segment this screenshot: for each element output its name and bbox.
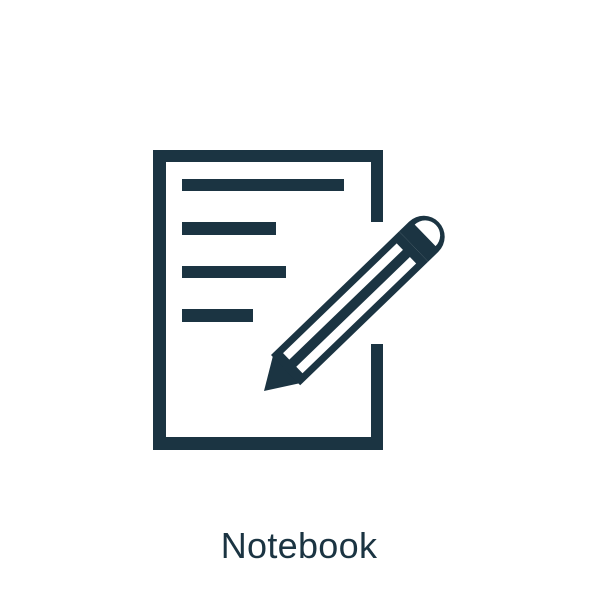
icon: pencil [249, 207, 453, 406]
icon: notebook page [153, 150, 383, 450]
title: Notebook: Notebook [221, 525, 378, 566]
